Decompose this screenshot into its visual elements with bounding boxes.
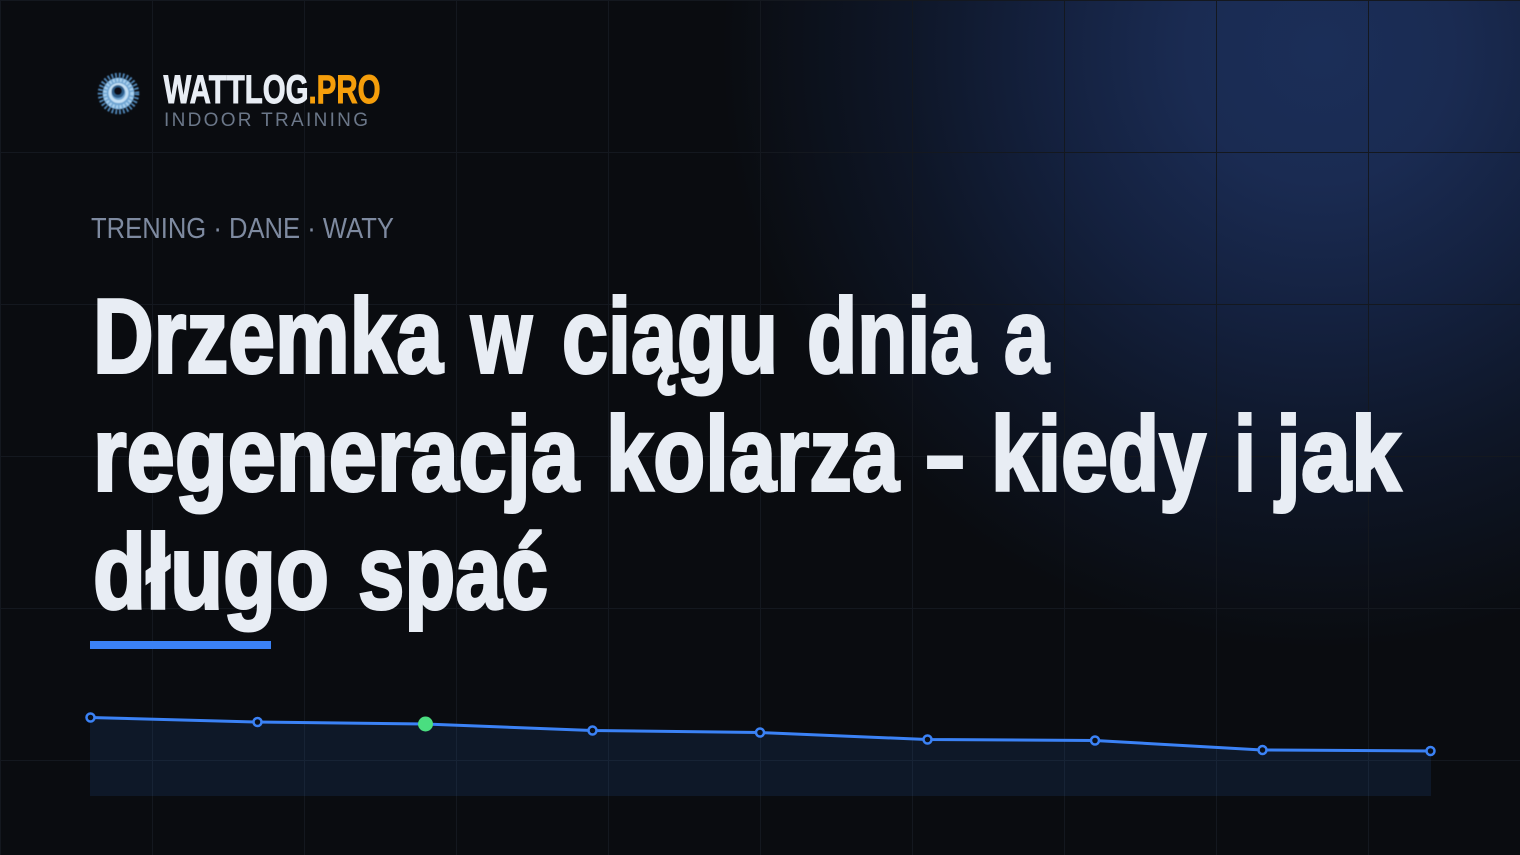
title: dnia — [807, 278, 977, 396]
chart line — [90, 718, 1430, 751]
title: długo — [93, 514, 329, 632]
wordmark: WATTLOG.PRO — [164, 68, 380, 112]
title: – — [926, 396, 964, 514]
title: w — [470, 278, 532, 396]
line chart — [86, 714, 1434, 796]
chart area fill — [90, 718, 1431, 796]
title: jak — [1274, 396, 1402, 514]
title — [93, 278, 1402, 632]
logo — [100, 68, 380, 131]
icon: cassette gear — [100, 75, 137, 112]
title: kiedy — [991, 396, 1206, 514]
title: kolarza — [606, 396, 900, 514]
title: a — [1004, 278, 1050, 396]
title: regeneracja — [93, 396, 580, 514]
title: spać — [358, 514, 548, 632]
kicker: TRENING · DANE · WATY — [91, 213, 394, 245]
title: i — [1234, 396, 1256, 514]
chart points — [86, 714, 1434, 755]
highlighted point — [418, 716, 433, 732]
title: Drzemka — [93, 278, 444, 396]
title underline accent — [90, 641, 271, 649]
tagline: INDOOR TRAINING — [164, 110, 368, 131]
title: ciągu — [562, 278, 778, 396]
